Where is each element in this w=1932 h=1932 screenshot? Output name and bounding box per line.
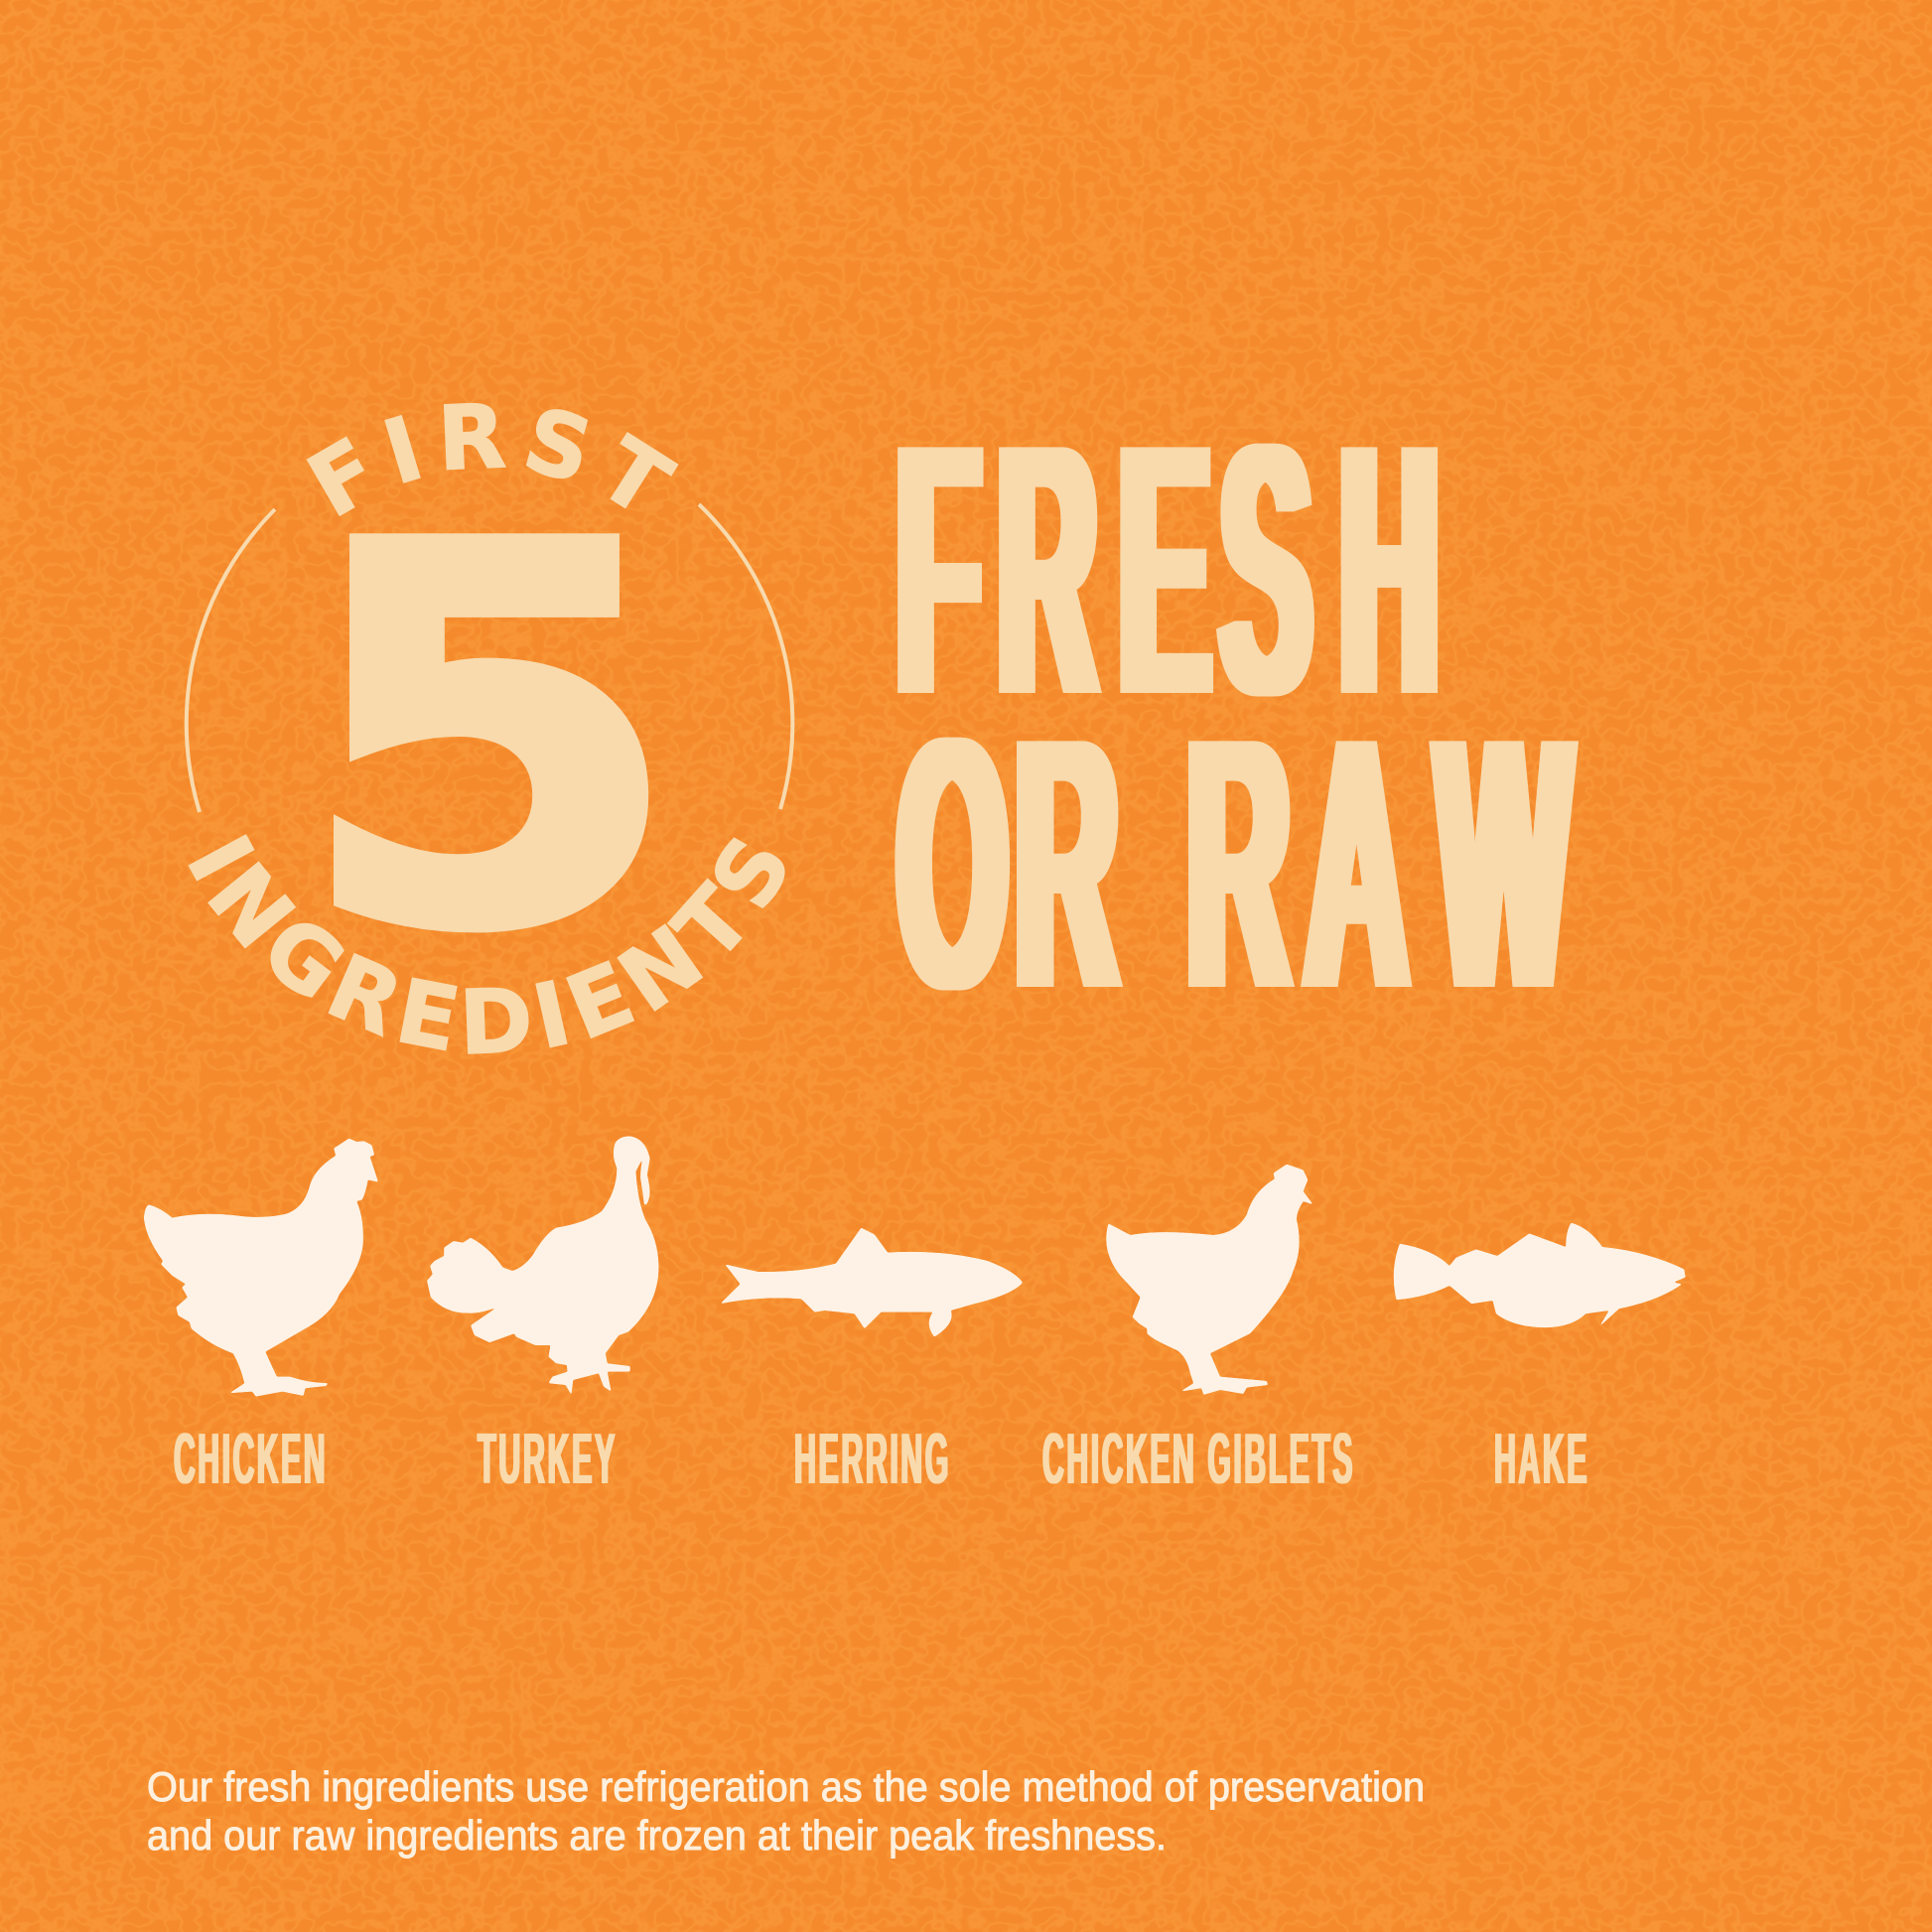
text: HAKE [1494, 1420, 1589, 1499]
icon: chicken [144, 1139, 378, 1397]
ingredient labels [174, 1420, 1589, 1499]
ingredient labels: CHICKEN [174, 1420, 328, 1499]
body line 1: Our fresh ingredients use refrigeration as the sole method of preservation [147, 1763, 1425, 1810]
curved text: FIRST: FIRST [306, 403, 679, 516]
badge ring arcs [187, 504, 792, 812]
badge: first 5 ingredients [185, 403, 794, 1054]
ingredient labels: HERRING [794, 1420, 951, 1499]
body text [147, 1763, 1425, 1859]
ingredient labels: CHICKEN GIBLETS [1042, 1420, 1355, 1499]
icon: turkey [427, 1136, 658, 1395]
icon: hake [1394, 1223, 1686, 1327]
heading line: FRESH: FRESH [897, 368, 1439, 769]
heading line: OR RAW: OR RAW [897, 663, 1572, 1062]
heading: fresh or raw [897, 368, 1572, 1062]
curved text: INGREDIENTS: INGREDIENTS [189, 834, 785, 1054]
icon: chicken giblets [1106, 1165, 1313, 1395]
icon: herring [720, 1228, 1023, 1337]
ingredient labels: TURKEY [478, 1420, 618, 1499]
big numeral 5: 5 [298, 437, 681, 1042]
body line 2: and our raw ingredients are frozen at their peak freshness. [147, 1812, 1167, 1859]
